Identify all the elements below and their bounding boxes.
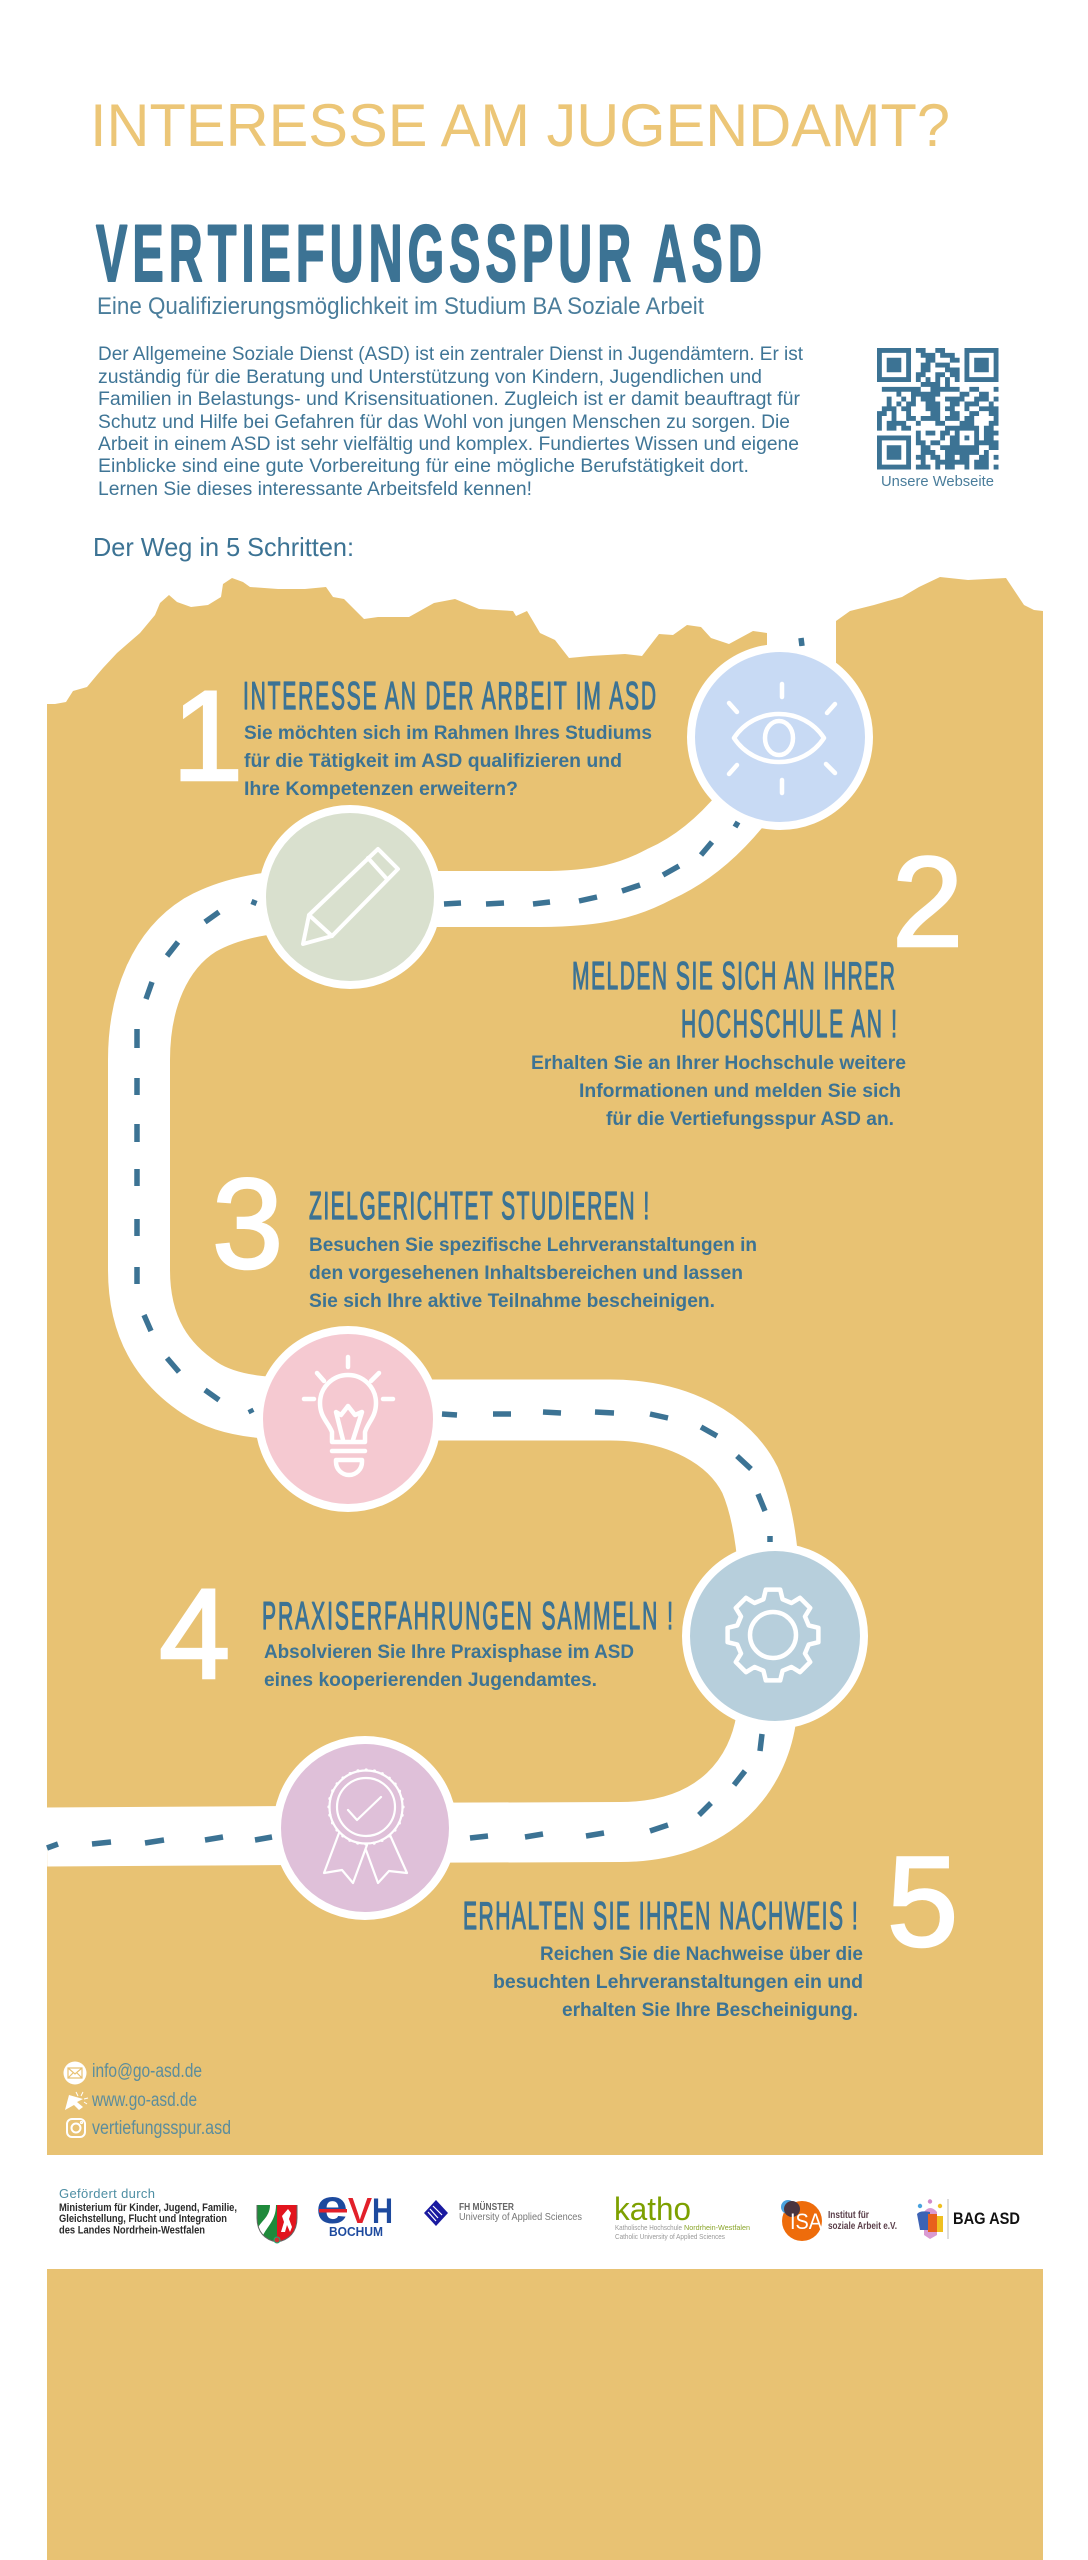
heading step 5: ERHALTEN SIE IHREN NACHWEIS ! [463, 1894, 858, 1938]
logo: EVH Bochum: e [316, 2181, 348, 2234]
heading step 3: ZIELGERICHTET STUDIEREN ! [309, 1184, 649, 1228]
heading step 4: PRAXISERFAHRUNGEN SAMMELN ! [262, 1594, 673, 1638]
step 2 [531, 831, 963, 1130]
text step 4 [264, 1642, 634, 1691]
heading step 2: MELDEN SIE SICH AN IHRER [572, 954, 895, 998]
funding text: Gefördert durch [59, 2186, 155, 2201]
heading step 2: HOCHSCHULE AN ! [681, 1002, 897, 1046]
funding text: Gleichstellung, Flucht und Integration [59, 2213, 227, 2225]
heading step 1: INTERESSE AN DER ARBEIT IM ASD [243, 674, 656, 718]
text step 5: Reichen Sie die Nachweise über die [540, 1944, 863, 1965]
number 5: 5 [887, 1831, 958, 1974]
intro text block: Lernen Sie dieses interessante Arbeitsfeld kennen! [98, 479, 532, 500]
logo: FH Münster: FH MÜNSTER [459, 2200, 514, 2213]
funding text: des Landes Nordrhein-Westfalen [59, 2224, 205, 2236]
contact instagram: vertiefungsspur.asd [92, 2118, 231, 2139]
number 2: 2 [892, 831, 963, 974]
step 4 [159, 1563, 673, 1706]
logo: ISA: Institut für [828, 2210, 869, 2221]
logo: FH Münster: University of Applied Sciences [459, 2211, 582, 2223]
text step 3: Besuchen Sie spezifische Lehrveranstaltungen in [309, 1235, 757, 1256]
logo: katho [614, 2191, 750, 2241]
logo: EVH Bochum: H [372, 2192, 393, 2231]
logo: katho: katho [614, 2191, 691, 2227]
text step 3: Sie sich Ihre aktive Teilnahme bescheinigen. [309, 1291, 715, 1312]
text step 2: für die Vertiefungsspur ASD an. [606, 1109, 894, 1130]
icon: cursor [65, 2092, 88, 2110]
number 1: 1 [172, 665, 243, 808]
QR caption: Unsere Webseite [881, 473, 994, 490]
icon: light bulb circle [259, 1330, 437, 1508]
icon: eye circle [691, 648, 869, 826]
intro text block: zuständig für die Beratung und Unterstützung von Kindern, Jugendlichen und [98, 367, 762, 388]
contact email: info@go-asd.de [92, 2061, 202, 2082]
funding text [59, 2186, 237, 2236]
road dashes [47, 638, 802, 1848]
intro text block: Einblicke sind eine gute Vorbereitung für eine mögliche Berufstätigkeit dort. [98, 456, 749, 477]
intro text block: Arbeit in einem ASD ist sehr vielfältig und komplex. Fundiertes Wissen und eigene [98, 434, 799, 455]
text step 1: für die Tätigkeit im ASD qualifizieren und [244, 751, 622, 772]
panel: torn yellow road background [47, 577, 1043, 2155]
logo: EVH Bochum: v [348, 2180, 373, 2233]
text step 4: Absolvieren Sie Ihre Praxisphase im ASD [264, 1642, 634, 1663]
contact block [64, 2061, 231, 2139]
text step 5: erhalten Sie Ihre Bescheinigung. [562, 2000, 858, 2021]
logo: BAG ASD: BAG ASD [953, 2209, 1020, 2228]
intro text block [98, 344, 804, 500]
heading: Vertiefungsspur ASD: VERTIEFUNGSSPUR ASD [96, 209, 762, 299]
intro text block: Schutz und Hilfe bei Gefahren für das Wohl von jungen Menschen zu sorgen. Die [98, 412, 790, 433]
funding text: Ministerium für Kinder, Jugend, Familie, [59, 2202, 237, 2214]
icon: instagram [67, 2119, 85, 2137]
icon: award ribbon circle [277, 1740, 453, 1916]
number 3: 3 [212, 1153, 283, 1296]
intro text block: Familien in Belastungs- und Krisensituationen. Zugleich ist er damit beauftragt für [98, 389, 801, 410]
section heading: five steps: Der Weg in 5 Schritten: [93, 532, 354, 562]
icon: envelope [64, 2062, 86, 2084]
road [47, 745, 780, 1837]
intro text block: Der Allgemeine Soziale Dienst (ASD) ist ein zentraler Dienst in Jugendämtern. Er ist [98, 344, 804, 365]
text step 1 [244, 723, 652, 800]
logo: EVH Bochum: BOCHUM [329, 2224, 383, 2239]
logo: NRW shield [257, 2205, 297, 2243]
logo: BAG ASD [917, 2199, 1020, 2239]
logo: EVH Bochum [316, 2180, 393, 2239]
step 3 [212, 1153, 757, 1312]
heading step 2 [572, 954, 897, 1046]
title: INTERESSE AM JUGENDAMT? [90, 92, 950, 159]
panel: lower yellow panel [47, 2269, 1043, 2560]
text step 1: Sie möchten sich im Rahmen Ihres Studiums [244, 723, 652, 744]
icon: pencil circle [262, 809, 438, 985]
logo: ISA: ISA [790, 2209, 822, 2234]
text step 2: Erhalten Sie an Ihrer Hochschule weitere [531, 1053, 906, 1074]
text step 4: eines kooperierenden Jugendamtes. [264, 1670, 597, 1691]
number 4: 4 [159, 1563, 230, 1706]
icon: gear circle [686, 1547, 864, 1725]
logo: katho: Nordrhein-Westfalen [684, 2223, 750, 2232]
logo: FH Münster [424, 2200, 582, 2226]
subtitle: Eine Qualifizierungsmöglichkeit im Studium BA Soziale Arbeit [97, 293, 704, 320]
logo: ISA [781, 2200, 897, 2241]
contact website: www.go-asd.de [91, 2090, 197, 2111]
step 1 [172, 665, 656, 808]
step 5 [463, 1831, 958, 2021]
logo: katho: Catholic University of Applied Sciences [615, 2232, 725, 2241]
text step 1: Ihre Kompetenzen erweitern? [244, 779, 518, 800]
text step 2 [531, 1053, 906, 1130]
text step 5: besuchten Lehrveranstaltungen ein und [493, 1972, 863, 1993]
logo: katho: Katholische Hochschule [615, 2223, 682, 2232]
text step 5 [493, 1944, 863, 2021]
logo: ISA: soziale Arbeit e.V. [828, 2221, 897, 2232]
text step 3 [309, 1235, 757, 1312]
text step 2: Informationen und melden Sie sich [579, 1081, 901, 1102]
text step 3: den vorgesehenen Inhaltsbereichen und lassen [309, 1263, 743, 1284]
icon: QR code [877, 348, 998, 470]
